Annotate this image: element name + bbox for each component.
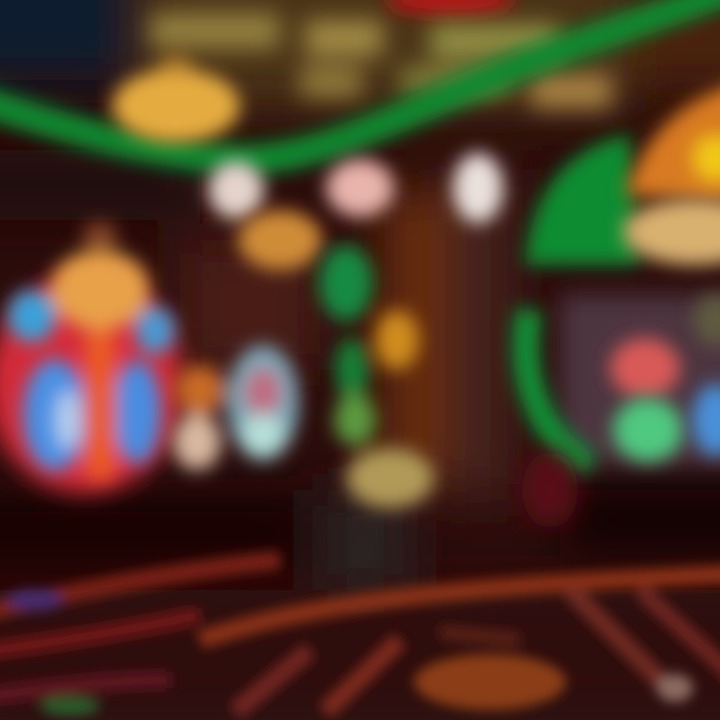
heading: blurred gold sign lettering xyxy=(150,13,612,108)
gold hanging lamp xyxy=(112,54,240,143)
small ornaments right of bauble xyxy=(173,345,299,470)
orange lamp xyxy=(238,210,322,270)
right upper arch: green, orange and yellow xyxy=(525,75,720,265)
central green leaves and ornaments xyxy=(319,245,434,508)
left ornament: large red bauble xyxy=(0,223,183,493)
patterned floor xyxy=(0,560,720,716)
top red accent xyxy=(385,0,515,16)
right panel: machine screen xyxy=(526,294,720,465)
dark red accent under right panel xyxy=(522,452,578,528)
white lamps xyxy=(208,153,503,223)
green garland band xyxy=(0,0,720,160)
